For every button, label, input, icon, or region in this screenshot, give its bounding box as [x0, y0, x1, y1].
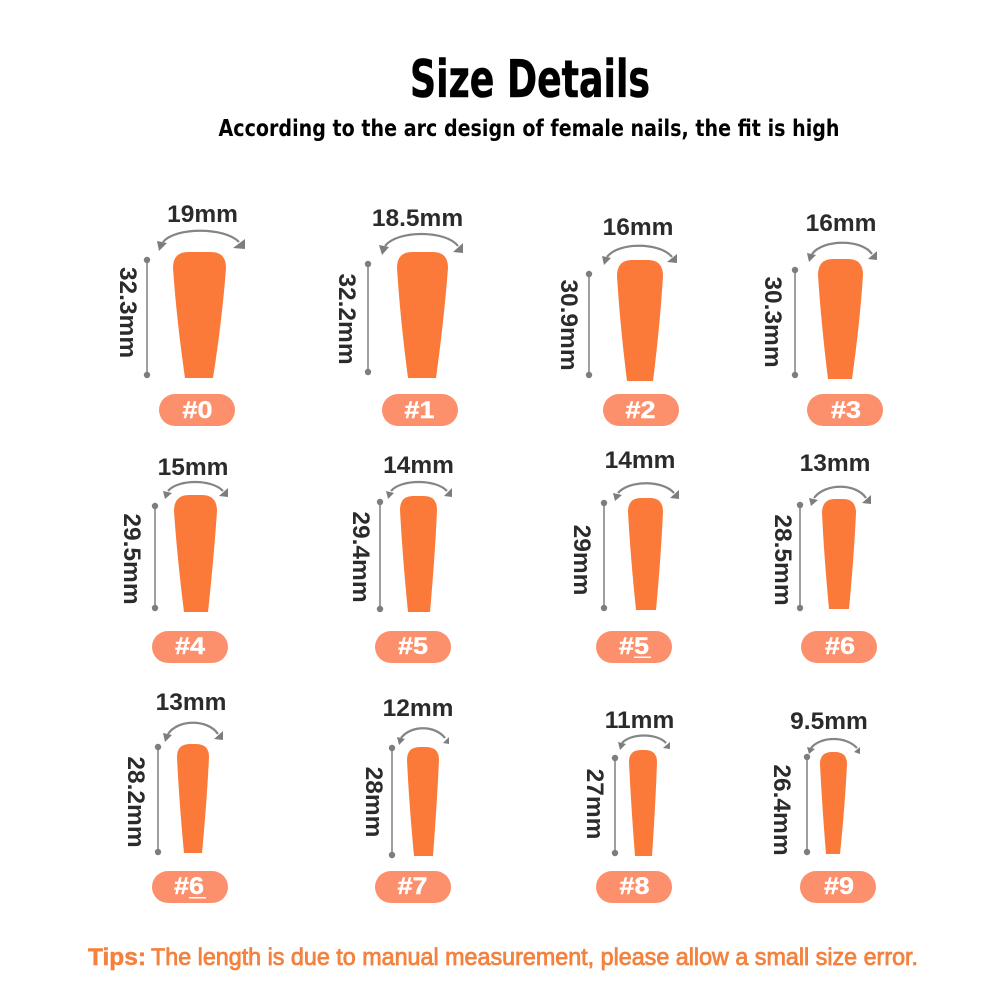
nail size #1: [333, 205, 463, 426]
nail size #9: 9.5mm: [790, 708, 868, 735]
nail size #3: 30.3mm: [759, 276, 786, 368]
nail size #5 second: 29mm: [568, 525, 595, 595]
nail size #6: 13mm: [800, 450, 870, 477]
nail size #7: 12mm: [383, 695, 453, 722]
nail size #9: 26.4mm: [768, 764, 795, 856]
tips note: The length is due to manual measurement, please allow a small size error.: [151, 944, 918, 971]
nail size #0: #0: [182, 397, 212, 424]
nail size #3: 16mm: [806, 210, 876, 237]
nail size #4: #4: [175, 633, 206, 660]
nail size #1: 18.5mm: [372, 205, 463, 232]
tips note: Tips:: [88, 944, 146, 971]
nail size #2: [555, 214, 679, 426]
nail size #6: 28.5mm: [769, 514, 796, 606]
nail size #4: 29.5mm: [118, 513, 145, 605]
nail size #5: 29.4mm: [347, 511, 374, 603]
nail size #7: 28mm: [360, 767, 387, 837]
nail size #4: [118, 454, 228, 663]
nail size #6: #6: [825, 633, 855, 660]
nail size #8: #8: [620, 873, 650, 900]
nail size #3: #3: [831, 397, 861, 424]
nail size #9: #9: [824, 873, 854, 900]
nail size #7: [360, 695, 453, 903]
nail size #0: [114, 201, 245, 426]
nail size #5 second: [568, 447, 679, 663]
nail size #5: #5: [398, 633, 428, 660]
nail size #0: 32.3mm: [114, 267, 141, 358]
nail size #8: 27mm: [581, 769, 608, 839]
nail size #1: #1: [404, 397, 434, 424]
nail size #5: [347, 452, 454, 663]
title: Size Details: [410, 50, 650, 110]
nail size #2: 16mm: [603, 214, 673, 241]
nail size #8: 11mm: [605, 707, 674, 734]
subtitle: According to the arc design of female nails, the fit is high: [218, 114, 840, 142]
nail size #6 second: 13mm: [156, 689, 226, 716]
nail size #5 second: #5: [619, 633, 649, 660]
nail size #4: 15mm: [158, 454, 228, 481]
nail size #2: 30.9mm: [555, 279, 582, 371]
nail size #8: [581, 707, 674, 903]
nail size #6 second: 28.2mm: [122, 756, 149, 848]
nail size #6 second: [122, 689, 228, 903]
nail size #5 second: 14mm: [605, 447, 675, 474]
nail size #7: #7: [398, 873, 428, 900]
nail size #3: [759, 210, 883, 426]
nail size #2: #2: [626, 397, 656, 424]
nail size #5: 14mm: [383, 452, 454, 479]
nail size #9: [768, 708, 876, 903]
nail size #6 second: #6: [174, 873, 204, 900]
nail size #0: 19mm: [167, 201, 238, 228]
nail size #6: [769, 450, 877, 663]
nail size #1: 32.2mm: [333, 273, 360, 365]
